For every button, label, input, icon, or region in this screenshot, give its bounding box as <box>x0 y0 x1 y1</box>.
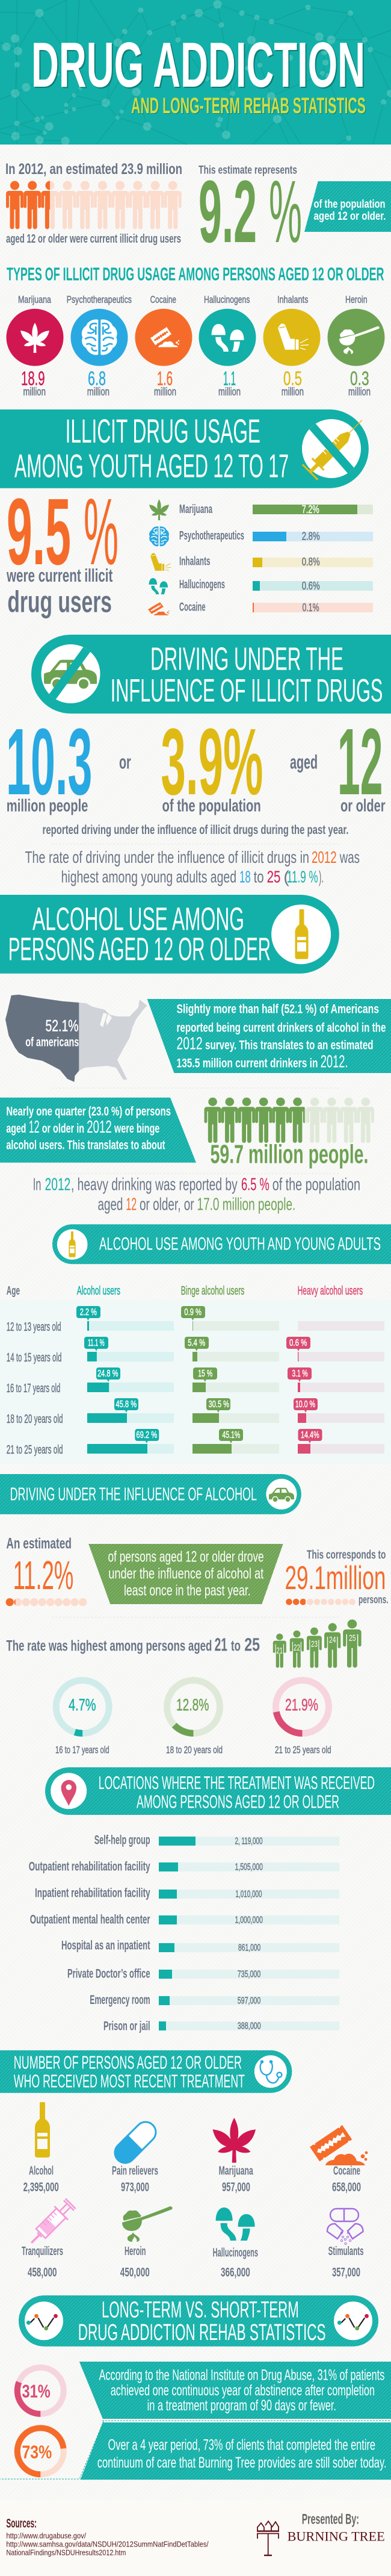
map: USA 52.1%: of americans <box>25 1035 79 1049</box>
drug type: heroin: Heroin <box>345 294 368 305</box>
donut chart: 21.9% <box>275 1680 331 1756</box>
callout: binge alcohol users: aged <box>6 1122 26 1136</box>
treatment: cocaine: Cocaine <box>333 2165 360 2178</box>
stat: 9.2 percent of population <box>199 163 391 261</box>
bar chart: treatment locations <box>29 1834 339 2033</box>
icon: bottle <box>295 909 308 959</box>
drug type: cocaine <box>135 294 192 398</box>
intro: 23.9 million users: In 2012, an estimated 23.9 million <box>5 161 182 178</box>
icon row: figures aged 21 to 25: 24 <box>329 1635 336 1645</box>
row: 16 to 17: 15 % <box>198 1369 212 1379</box>
row: prison or jail: 388,000 <box>238 2021 261 2032</box>
icon: no driving <box>41 643 100 703</box>
callout: 31 percent abstinence <box>79 2362 391 2419</box>
drug type: inhalants: 0.5 <box>283 367 302 389</box>
row: outpatient rehabilitation: 1,505,000 <box>235 1862 263 1872</box>
treatment: marijuana <box>213 2118 256 2194</box>
callout: drove under the influence: of persons aged 12 or older drove <box>108 1548 264 1565</box>
row: self-help group <box>94 1834 339 1847</box>
banner: illicit drug usage among youth <box>0 409 369 488</box>
header banner <box>0 0 391 145</box>
treatment: marijuana: Marijuana <box>219 2165 253 2178</box>
row: 21 to 25: 21 to 25 years old <box>7 1443 63 1457</box>
text: heavy drinking: 17.0 million people. <box>197 1195 295 1214</box>
stat: 9.5 percent youth <box>6 479 119 619</box>
treatment: marijuana: 957,000 <box>222 2180 250 2194</box>
donut chart: 73%: 73% <box>22 2441 52 2462</box>
row: inhalants 0.8% <box>150 553 373 571</box>
donut chart: 31%: 31% <box>22 2380 51 2401</box>
sources: http://www.samhsa.gov/data/NSDUH/2012SummNatFindDetTables/ <box>6 2540 209 2549</box>
banner: locations of treatment <box>45 1767 391 1815</box>
sources: http://www.drugabuse.gov/ <box>6 2531 86 2540</box>
donut chart: 21.9%: 21 to 25 years old <box>275 1744 331 1756</box>
stats: 10.3 million, 3.9%, aged 12 or older: 3.9% <box>161 709 263 815</box>
row: cocaine 0.1%: Cocaine <box>179 601 206 614</box>
callout: 135.5 million drinkers: 2012 <box>177 1034 203 1054</box>
text: rate of driving 18 to 25: 18 <box>239 868 251 886</box>
donut chart: 12.8%: 12.8% <box>176 1696 209 1714</box>
drug type: marijuana: 18.9 <box>21 367 45 389</box>
row: psychotherapeutics 2.8% <box>149 526 373 546</box>
treatment: cocaine <box>310 2125 368 2194</box>
callout: binge alcohol users <box>0 1098 196 1163</box>
callout: drove under the influence: least once in the past year. <box>124 1582 251 1599</box>
row: 18 to 20: 30.5 % <box>209 1399 229 1410</box>
banner: driving under the influence of alcohol <box>0 1474 301 1514</box>
row: hospital inpatient <box>61 1939 339 1953</box>
treatment: stimulants: 357,000 <box>332 2266 360 2280</box>
stats: 10.3 million, 3.9%, aged 12 or older <box>6 709 385 816</box>
table headings: Binge alcohol users <box>181 1284 244 1298</box>
row: 21 to 25: 69.2 % <box>136 1430 157 1440</box>
callout: 135.5 million drinkers <box>147 999 391 1073</box>
text: heavy drinking: , heavy drinking was reported by <box>71 1175 238 1195</box>
stat: 9.5 percent youth: drug users <box>7 585 112 619</box>
text: rate of driving 18 to 25: highest among young adults aged <box>61 868 236 886</box>
text: heavy drinking: aged <box>97 1195 123 1214</box>
icon: car <box>269 1488 294 1502</box>
icon row: figures aged 21 to 25: 25 <box>349 1633 356 1643</box>
drug type: inhalants <box>263 294 320 398</box>
callout: 135.5 million drinkers: 2012. <box>321 1053 348 1072</box>
drug type: psychotherapeutics: million <box>87 386 109 398</box>
stat: 11.2 percent <box>6 1535 87 1606</box>
text: rate highest among 21 to 25: The rate was highest among persons aged <box>6 1638 212 1655</box>
callout: binge alcohol users: Nearly one quarter (23.0 %) of persons <box>6 1105 171 1119</box>
callout: drove under the influence <box>88 1544 283 1604</box>
treatment: hallucinogens: Hallucinogens <box>213 2247 258 2260</box>
row: emergency room <box>90 1993 339 2007</box>
text: heavy drinking: 12 <box>126 1195 137 1214</box>
text: rate of driving 18 to 25: ). <box>319 868 324 886</box>
row: emergency room: Emergency room <box>90 1993 150 2007</box>
dots: 29.1 million <box>286 1599 356 1605</box>
donut chart: 4.7%: 4.7% <box>69 1696 96 1714</box>
icon: stethoscope <box>260 2061 282 2083</box>
drug type: hallucinogens: million <box>218 386 241 398</box>
row: hospital inpatient: 861,000 <box>238 1943 260 1953</box>
row: 18 to 20: 45.8 % <box>115 1399 137 1410</box>
callout: drove under the influence: under the influence of alcohol at <box>108 1566 263 1582</box>
row: marijuana 7.2% <box>149 499 373 520</box>
stats: 10.3 million, 3.9%, aged 12 or older: aged <box>290 751 318 773</box>
row: private doctor: Private Doctor’s office <box>67 1967 150 1980</box>
row: 21 to 25: 45.1% <box>222 1430 240 1440</box>
text: rate of driving 18 to 25: 25 <box>267 868 280 886</box>
stat: 9.2 percent of population: 9.2 <box>199 163 257 261</box>
stat: 9.2 percent of population: % <box>269 163 302 261</box>
treatment: hallucinogens <box>213 2207 258 2280</box>
icon: chart left <box>25 2301 63 2340</box>
drug type: psychotherapeutics <box>67 294 132 398</box>
text: rate highest among 21 to 25: 25 <box>244 1634 260 1655</box>
donut chart: 21.9%: 21.9% <box>285 1696 318 1714</box>
treatment: pain relievers: Pain relievers <box>112 2165 158 2178</box>
row: 14 to 15: 14 to 15 years old <box>7 1351 61 1364</box>
row: 14 to 15: 11.1 % <box>88 1338 105 1348</box>
text: rate of driving 18 to 25: 2012 <box>312 848 337 866</box>
donut chart: 31% <box>17 2368 64 2414</box>
row: outpatient rehabilitation: Outpatient rehabilitation facility <box>29 1860 150 1874</box>
text: rate of driving 18 to 25: ( <box>283 868 289 886</box>
drug type: marijuana <box>6 294 64 398</box>
drug type: hallucinogens <box>199 294 256 398</box>
row: hallucinogens 0.6% <box>149 578 373 594</box>
row: self-help group: 2, 119,000 <box>235 1836 263 1846</box>
treatment: heroin: 450,000 <box>120 2266 150 2280</box>
row: emergency room: 597,000 <box>238 1996 260 2006</box>
callout: binge alcohol users: 12 <box>29 1118 40 1137</box>
row: inpatient rehabilitation: 1,010,000 <box>236 1889 262 1899</box>
row: marijuana 7.2%: Marijuana <box>179 503 213 516</box>
text: rate highest among 21 to 25 <box>6 1634 260 1655</box>
row: inpatient rehabilitation: Inpatient rehabilitation facility <box>35 1887 150 1900</box>
text: rate of driving 18 to 25: to <box>254 868 264 886</box>
row: cocaine 0.1% <box>148 601 373 615</box>
callout: binge alcohol users: were binge <box>114 1122 159 1136</box>
row: inpatient rehabilitation <box>35 1887 339 1900</box>
drug type: heroin: million <box>348 386 371 398</box>
treatment: tranquilizers: 458,000 <box>28 2266 57 2280</box>
intro: 23.9 million users: aged 12 or older were current illicit drug users <box>6 232 181 246</box>
intro: 23.9 million users <box>5 161 182 246</box>
donut chart: 12.8%: 18 to 20 years old <box>166 1744 223 1756</box>
treatment: heroin <box>120 2206 173 2280</box>
callout: binge alcohol users: 2012 <box>87 1118 112 1137</box>
row: inhalants 0.8%: 0.8% <box>302 556 320 568</box>
icon: map pin <box>61 1780 76 1806</box>
row: 12 to 13: 0.9 % <box>184 1307 202 1318</box>
row: inhalants 0.8%: Inhalants <box>179 555 211 568</box>
text: % <box>84 479 119 585</box>
callout: binge alcohol users: or older in <box>42 1122 84 1136</box>
callout: 135.5 million drinkers: 135.5 million current drinkers in <box>177 1057 318 1071</box>
row: private doctor: 735,000 <box>238 1969 260 1980</box>
stat: 9.5 percent youth: were current illicit <box>6 565 112 586</box>
treatment: tranquilizers <box>22 2197 78 2280</box>
text: rate of driving 18 to 25: 11.9 % <box>287 868 318 886</box>
drug type: marijuana: Marijuana <box>18 294 51 305</box>
map: USA 52.1%: 52.1% <box>46 1016 78 1034</box>
footer panel <box>0 2500 391 2576</box>
drug type: psychotherapeutics: Psychotherapeutics <box>67 294 132 305</box>
stats: 10.3 million, 3.9%, aged 12 or older: 10.3 <box>6 709 92 815</box>
row: cocaine 0.1%: 0.1% <box>302 602 319 614</box>
table headings <box>7 1284 363 1298</box>
donut chart: 4.7% <box>55 1680 109 1756</box>
row: hospital inpatient: Hospital as an inpatient <box>61 1939 150 1953</box>
icon: chart right <box>334 2301 372 2340</box>
stats: 10.3 million, 3.9%, aged 12 or older: or <box>119 751 131 773</box>
row: 14 to 15 <box>7 1337 384 1364</box>
stats: 10.3 million, 3.9%, aged 12 or older: million people <box>7 797 88 816</box>
banner: driving under the influence of illicit drugs <box>31 635 391 714</box>
row: 18 to 20 <box>7 1398 384 1426</box>
drug type: psychotherapeutics: 6.8 <box>88 367 106 389</box>
row: 14 to 15: 0.6 % <box>289 1338 307 1348</box>
row: 21 to 25 <box>7 1429 384 1457</box>
row: 18 to 20: 10.0 % <box>295 1399 315 1410</box>
drug type: heroin: 0.3 <box>350 367 369 389</box>
banner: alcohol use among youth <box>52 1224 391 1264</box>
bar chart: youth drug usage <box>148 499 373 615</box>
drug type: hallucinogens: Hallucinogens <box>204 294 250 305</box>
banner: alcohol use among persons: ALCOHOL USE AMONG <box>32 901 244 938</box>
row: 16 to 17 <box>7 1367 384 1395</box>
dots: 11.2 of 100 <box>6 1598 87 1606</box>
table headings: Age <box>7 1284 20 1298</box>
drug type: inhalants: million <box>282 386 304 398</box>
row: 12 to 13: 2.2 % <box>80 1307 97 1318</box>
icon row: figures aged 21 to 25: 21 <box>277 1646 283 1656</box>
row: 16 to 17: 24.8 % <box>97 1369 118 1379</box>
stat: 29.1 million persons <box>285 1549 389 1606</box>
drug type: cocaine: Cocaine <box>150 294 176 305</box>
row: 16 to 17: 16 to 17 years old <box>7 1382 60 1395</box>
stat: 11.2 percent: 11.2% <box>13 1553 73 1598</box>
row: outpatient mental health <box>30 1912 339 1926</box>
row: self-help group: Self-help group <box>94 1834 150 1847</box>
treatment: pain relievers <box>109 2117 161 2194</box>
treatment: cocaine: 658,000 <box>332 2180 361 2194</box>
logo: burning tree mark <box>257 2521 279 2556</box>
row: hallucinogens 0.6%: 0.6% <box>302 580 320 592</box>
text: heavy drinking <box>33 1175 360 1214</box>
treatment: pain relievers: 973,000 <box>121 2180 149 2194</box>
drug type: hallucinogens: 1.1 <box>223 367 236 389</box>
treatment: alcohol <box>23 2102 59 2194</box>
stat: 9.5 percent youth: 9.5 <box>7 479 71 585</box>
drug type: inhalants: Inhalants <box>277 294 308 305</box>
text: rate highest among 21 to 25: 21 <box>215 1634 227 1655</box>
text: heavy drinking: 2012 <box>45 1175 70 1195</box>
icon: no syringe <box>302 419 362 481</box>
row: outpatient rehabilitation <box>29 1860 339 1874</box>
row: marijuana 7.2%: 7.2% <box>302 503 319 515</box>
text: heavy drinking: or older, or <box>140 1195 194 1214</box>
row: 21 to 25: 14.4% <box>301 1430 319 1440</box>
table headings: Alcohol users <box>77 1284 120 1298</box>
treatment: stimulants: Stimulants <box>328 2245 363 2258</box>
row: 18 to 20: 18 to 20 years old <box>7 1413 63 1426</box>
row: outpatient mental health: Outpatient mental health center <box>30 1912 150 1926</box>
treatment: alcohol: 2,395,000 <box>23 2180 59 2194</box>
treatment: stimulants <box>327 2209 363 2280</box>
text: rate of driving 18 to 25: was <box>339 848 360 866</box>
drug type: heroin <box>327 294 385 398</box>
banner: alcohol use among persons <box>0 895 339 974</box>
donut chart: 73% <box>17 2428 64 2474</box>
logo: burning tree wordmark: BURNING TREE <box>288 2529 385 2544</box>
treatment: heroin: Heroin <box>125 2245 146 2258</box>
stats: 10.3 million, 3.9%, aged 12 or older: of the population <box>162 797 261 816</box>
text: heavy drinking: In <box>33 1175 41 1195</box>
text: rate highest among 21 to 25: to <box>231 1638 241 1655</box>
row: outpatient mental health: 1,000,000 <box>235 1915 263 1925</box>
row: prison or jail <box>103 2020 339 2033</box>
drug type: cocaine: million <box>154 386 176 398</box>
icon row: people 2.5 of 10 <box>6 181 182 229</box>
row: 16 to 17: 3.1 % <box>292 1369 308 1379</box>
icon row: people 59.7 million <box>205 1098 374 1143</box>
stat: 9.2 percent of population: This estimate represents <box>199 164 297 177</box>
treatment: hallucinogens: 366,000 <box>221 2266 250 2280</box>
text: rate of driving 18 to 25 <box>25 848 360 886</box>
treatment: tranquilizers: Tranquilizers <box>22 2245 63 2258</box>
icon row: figures aged 21 to 25: 23 <box>311 1639 318 1649</box>
sources: Sources: <box>6 2516 37 2530</box>
drug type: marijuana: million <box>23 386 46 398</box>
treatment: alcohol: Alcohol <box>29 2165 54 2178</box>
banner: number of persons treated <box>0 2050 292 2093</box>
sources: NationalFindings/NSDUHresults2012.htm <box>6 2548 126 2557</box>
row: psychotherapeutics 2.8%: Psychotherapeutics <box>179 529 244 543</box>
icon row: figures aged 21 to 25 <box>273 1620 362 1668</box>
text: heavy drinking: 6.5 % <box>241 1175 269 1195</box>
row: hallucinogens 0.6%: Hallucinogens <box>179 578 225 591</box>
banner: long-term vs short-term <box>19 2295 378 2347</box>
row: 14 to 15: 5.4 % <box>188 1338 205 1348</box>
stat: 11.2 percent: An estimated <box>6 1535 72 1552</box>
icon row: figures aged 21 to 25: 22 <box>294 1643 300 1653</box>
callout: 73 percent sober <box>81 2422 391 2480</box>
row: 12 to 13: 12 to 13 years old <box>7 1321 61 1334</box>
drug type: cocaine: 1.6 <box>157 367 173 389</box>
donut chart: 12.8% <box>166 1680 223 1756</box>
row: prison or jail: Prison or jail <box>103 2020 150 2033</box>
row: psychotherapeutics 2.8%: 2.8% <box>302 530 320 543</box>
sources <box>6 2516 209 2557</box>
panel: alcohol use by age chart <box>0 1299 391 1464</box>
map: USA 52.1% <box>5 995 147 1082</box>
callout: binge alcohol users: alcohol users. This translates to about <box>6 1138 165 1152</box>
row: private doctor <box>67 1967 339 1980</box>
row: 12 to 13 <box>7 1306 384 1334</box>
donut chart: 4.7%: 16 to 17 years old <box>55 1744 109 1756</box>
